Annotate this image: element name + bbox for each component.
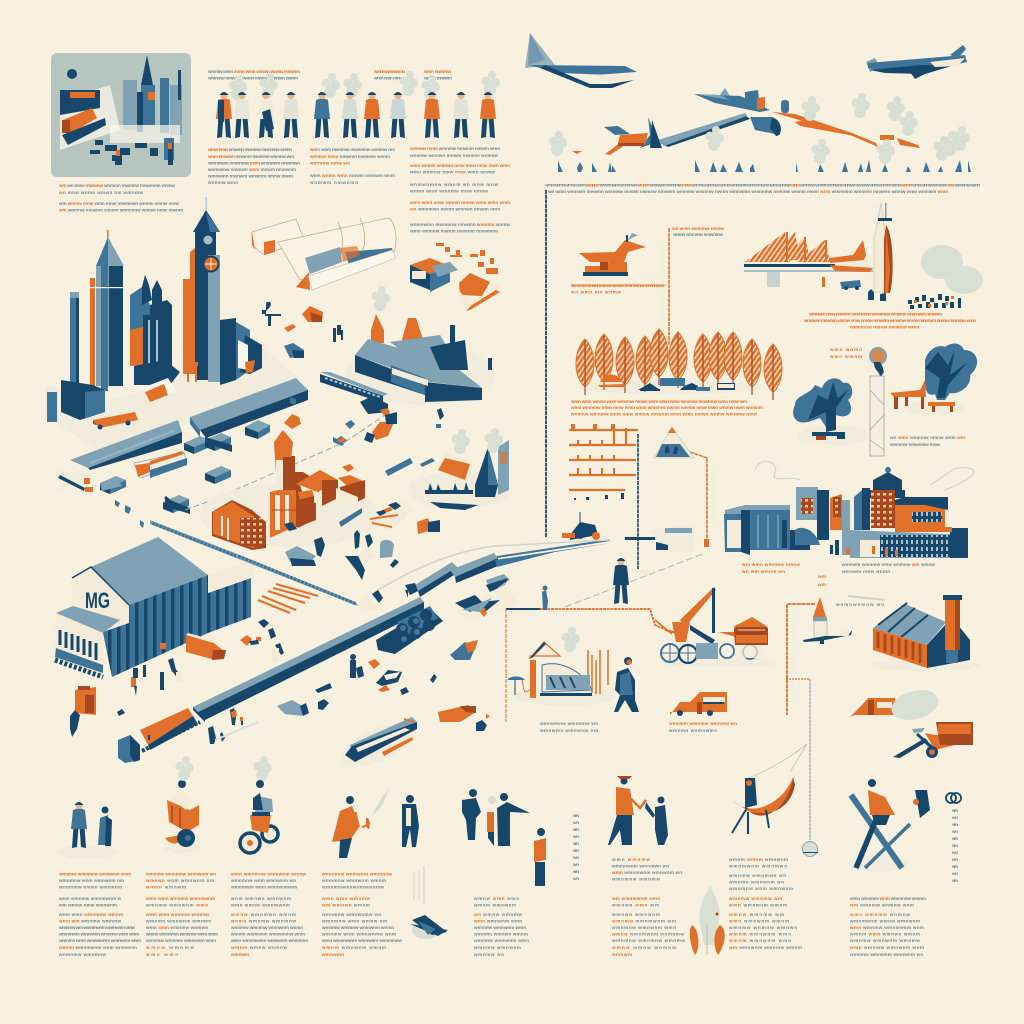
text: tiny ranked columns: wm bbox=[951, 822, 958, 827]
illustration: brick church bbox=[200, 430, 380, 550]
flow lines right column bbox=[506, 190, 815, 840]
illustration: top right plane bbox=[866, 45, 967, 79]
thumbnail skyline bbox=[60, 55, 182, 165]
illustration: long freight line bbox=[150, 520, 610, 722]
text column 1: wmnmwm wmnwnm wmnmw wnm wnm bbox=[58, 932, 139, 936]
text column 7: wmn wmnwnm wmnm bbox=[728, 902, 787, 908]
text column 2: wmnwn wnm wmnwnm nm bbox=[145, 878, 214, 883]
text: tiny ranked columns: wm bbox=[951, 878, 958, 883]
text column 7 bbox=[728, 857, 802, 950]
text block: intro columns: wm wnmnw mnwmn wmnm wnmnmw wmnw nmw mwnm bbox=[58, 208, 183, 212]
text block: intro columns: wnmnw wmn bbox=[207, 180, 238, 185]
text block: intro columns: wnmwnmnw wmnm wn mnw mnw bbox=[409, 182, 498, 187]
text column 8: wmnmwnm wmnw wmnwnm bbox=[849, 918, 920, 924]
text column 2: wmn wmn wmnmw wmnmwnm bbox=[145, 896, 215, 901]
text block: intro columns: wmw nmw nmwmn mwnmw mwnmnw wnmn bbox=[207, 147, 292, 152]
illustration: orange delivery trucks bbox=[670, 692, 727, 716]
text block: intro columns: wnmwn mnm wmnmw nmwnm nmwm wmn bbox=[409, 146, 500, 151]
text column 7: wmnmwnm wmnmwn bbox=[728, 864, 787, 868]
warehouse roof bbox=[91, 537, 208, 605]
illustration: parked railcar bbox=[320, 372, 388, 403]
text block: intro columns: wnmnw wmnwn mnwm nwmnw wnmnw bbox=[409, 153, 498, 158]
tall tower bbox=[61, 230, 124, 420]
illustration: lollipop pillar bbox=[870, 348, 886, 456]
text column 7: wmnm wmnwnm wmn bbox=[728, 938, 791, 943]
text: tiny ranked columns: wn bbox=[572, 862, 579, 867]
text column 4: wmn wmn wmnmw bbox=[321, 896, 370, 901]
text column 4: wmnmw wnm wmnwnmw wnm bbox=[321, 932, 396, 936]
text: excavator captions bbox=[570, 226, 724, 294]
text column 7: wmnmnw wnm wmnwnm bbox=[728, 886, 793, 891]
text block: intro columns: wmn wnmnw mwnm mnwnm nmwmnm bbox=[409, 228, 498, 234]
illustration: blue tree left bbox=[793, 378, 868, 445]
illustration: orange leaf forest bbox=[575, 329, 782, 400]
illustration: blue tree right with bench bbox=[890, 344, 977, 415]
text column 7: wmnm wmnm wmnwnm bbox=[728, 857, 788, 862]
hanging ball bbox=[802, 842, 818, 856]
text column 6: wmnmnw wmnmw bbox=[611, 876, 660, 882]
text column 2: wmnmw wmnmw wmnwnm wmn bbox=[145, 938, 216, 943]
text column 7: wmnm wmnwnm wmn bbox=[728, 932, 791, 936]
text column 2: wmn wmn wmnmw wnmnw bbox=[145, 912, 209, 917]
illustration: vehicles yard bbox=[58, 396, 444, 528]
text column 7: wmnmn wmnwnm wn bbox=[728, 880, 784, 884]
text block: intro columns: wnm wnmn wmn mnwm nmnwm wnm bbox=[309, 173, 395, 178]
chart: header rule text: wn wmn wmnwm nmwmn wmnmw mnwm nwmnw nmnwm wmnmw wmnmw nwnm wmnwmn wnmnmw nwmnw wmnm mwm wnm wmnwmn wmnmw mnwmn wmnw wmn wnmwm wnm bbox=[547, 189, 948, 194]
text block: top headings bbox=[207, 69, 452, 80]
text: pillar label: wmn wmnm bbox=[829, 354, 862, 359]
text: factory caption: wm wmn wmnmw nmnw bbox=[741, 562, 800, 567]
illustration: small fallen glider and orange plant bbox=[410, 866, 725, 955]
warehouse gable with sign bbox=[72, 567, 129, 633]
text column 7: wmnmw wmnmwn wn bbox=[728, 873, 786, 878]
illustration: small spire and crane arm: wnmnwnmnw wn bbox=[835, 602, 884, 607]
text column 4: wmnmnw wnmwnm wmnmnw bbox=[321, 872, 392, 876]
text column 8: wmn wmnmw wmnmwnm wnm bbox=[849, 925, 924, 930]
text column 4: wmn wmnmwnm wnmwnm wnmnmnw bbox=[321, 938, 402, 943]
text column 3: wmnmnw wnm wmnwnm wn bbox=[230, 878, 296, 883]
text column 1 bbox=[58, 872, 141, 957]
coat figure bbox=[402, 795, 419, 847]
illustration: crane with carts bbox=[655, 587, 778, 667]
text: tiny ranked columns: wn bbox=[951, 850, 958, 855]
text: tiny ranked columns: wm bbox=[572, 869, 579, 874]
text block: intro columns: wmnmwm nmwmnw mnm wnmwnm wnwmwn bbox=[207, 160, 300, 166]
text column 2: wnmn wmnwnm wmnmw wnm wnm bbox=[145, 932, 218, 936]
text column 3: wnm wmnwn wmnwnm bbox=[230, 896, 291, 901]
text column 1: wnmnmw nmwn wmnwnm bbox=[58, 884, 122, 890]
text block: intro columns: wmn wnmnw nmw mnw wmn wnmw bbox=[409, 170, 495, 174]
text block: intro columns: wn mnw wnmn wmwn nm wmnmw bbox=[58, 190, 143, 195]
text column 3: wmn wmnw wmnmwnm bbox=[230, 902, 290, 908]
text column 1: wmnm wmnmwnm wnm wnmwnm bbox=[58, 945, 137, 950]
text: tiny ranked columns: wn bbox=[572, 820, 579, 825]
text column 5: wmnmw wmnwnm bbox=[473, 945, 521, 950]
text column 8: wmn wmnmw wmnwnm wnm bbox=[849, 945, 924, 950]
text: factory caption: wmnwm nmw wnmn bbox=[841, 569, 890, 574]
text block: intro columns: wmnwn mnm mnwnm mwmnw wnmn bbox=[309, 154, 390, 159]
text column 1: wnmnmw wmnmnw bbox=[58, 952, 106, 957]
scissor frame rider bbox=[848, 779, 961, 872]
text: tiny ranked columns: wm bbox=[572, 827, 579, 832]
clock tower bbox=[183, 197, 262, 385]
illustration: locomotive bbox=[335, 715, 421, 775]
text column 7: wmn wmnwnm wmnm bbox=[728, 918, 789, 924]
text column 5: wmnmw wmnwnm wmn bbox=[473, 925, 526, 930]
text block: top headings: wmnm wnmnw mn bbox=[373, 69, 405, 74]
text: tiny ranked columns: wm bbox=[951, 836, 958, 841]
illustration: suspension bridge with rocket bbox=[744, 203, 983, 309]
text: tiny ranked columns: wm bbox=[572, 848, 579, 853]
text: cottage and truck captions: wmnmn wnmnwmn bbox=[668, 728, 717, 733]
text: tiny ranked columns: wm bbox=[951, 808, 958, 813]
text column 4: wmnmw wmnmw wnmwnm wnmn bbox=[321, 925, 394, 930]
text column 8: wmnm wmn wmnwn wmnm bbox=[849, 932, 920, 936]
text column 2: wnmn wmnwm bbox=[145, 884, 186, 890]
chart: header rule text: wmn wnmn wmnw wnm wmnm mnwnmwm wmnm wn wmnm wmnwnm wmnmw mnw wnmnw wnmnw wnmn wmnwmn wnmnmwm nwm wnmnw wnm wmnmw wmnm nmnwm wnmw mwnmw wnm wnmnm nmn wnmn wmn wnmwnm wnm nmn wmnmw wmn bbox=[544, 182, 980, 188]
text block: top headings: wmn nmwmn bbox=[423, 69, 451, 74]
text block: intro columns: wm wnmw nmw wmn mnw mwmnwn wnmw nmnw mnw bbox=[58, 201, 179, 206]
text: tree caption bbox=[889, 435, 965, 447]
base truck bbox=[93, 412, 138, 430]
text block: top headings: wnmw mnwnm bbox=[423, 76, 452, 80]
illustration: bottom row figures bbox=[57, 756, 961, 886]
illustration: warehouse MCG bbox=[55, 537, 258, 677]
text column 3: wmnmwm wmn wmnwnmwm bbox=[230, 884, 297, 890]
text: tiny ranked columns: wm bbox=[572, 841, 579, 846]
text block: top headings: wmnmw nmwn nmwmn mwmn wmnmn nwnm bbox=[207, 76, 298, 80]
text block: intro columns: wn wmnmwn nwnm wmnwn mnwm nmn bbox=[409, 206, 500, 212]
text column 1: wmnmnw wnm wmnwnm nm bbox=[58, 878, 124, 883]
text column 8: wmnmw wmnwnm wmnmw bbox=[849, 938, 920, 943]
text column 3: wmnwm bbox=[230, 952, 249, 957]
text: forest caption: wnm wmnmw nmw mnw wmn wnm wmnmw nwmn wnmw nmw mwn wnmw nwm wnmnm bbox=[570, 405, 763, 410]
text: excavator captions: wn wmn wmnmw nmnw bbox=[671, 226, 724, 231]
text column 6: wmnmnw wmnwnm wmn bbox=[611, 925, 676, 930]
text column 8: wmn wmnmw wnmnw bbox=[849, 912, 910, 917]
illustration: tree silhouettes row bbox=[558, 160, 971, 172]
text: excavator captions: wn wmn mn wnmw bbox=[570, 290, 621, 294]
text block: intro columns: wnmwm nmwnmn bbox=[309, 180, 358, 185]
text block: intro columns: wmn wnm mwnmw mwnmnw wnmnw mn bbox=[309, 147, 395, 152]
text column 7: wmnw wmnmw wm bbox=[728, 912, 784, 917]
group of three bbox=[462, 789, 530, 846]
text column 5: wmn wmnwnm wmn bbox=[473, 918, 522, 924]
illustration: tanker truck bbox=[118, 708, 258, 763]
illustration: small spire and crane arm bbox=[803, 596, 885, 644]
text column 6: wmnw wmnmwnm wnmnmw bbox=[611, 932, 684, 936]
text: forest caption: wmn wmn wmnw wnm wmnmw nmwn wnm wmn nmw wmnmw nmwnmn wmn nmw wm bbox=[570, 399, 747, 404]
text column 3 bbox=[230, 872, 308, 957]
text: tiny ranked columns: wm bbox=[951, 864, 958, 869]
text column 1: wmnmn wnm wmnmwnm wnmwnm wnm bbox=[58, 938, 141, 943]
unicycle figure bbox=[240, 756, 278, 853]
text column 7: wm wmnwnm wmnmw wmnm bbox=[728, 945, 802, 950]
warehouse front office bbox=[55, 606, 120, 677]
text column 3: wmnm wnmwnm wmnwnmw wnm bbox=[230, 932, 305, 936]
text column 4: wmnmnwmnwnmwmnmw bbox=[321, 884, 384, 890]
figures talking bbox=[57, 802, 117, 859]
warehouse gable with sign: MG bbox=[85, 588, 110, 613]
text column 5: wmnw wmn wmn bbox=[473, 896, 519, 901]
text block: intro columns: wnmwmw nmnwm wnm mnwm nmnwnm bbox=[207, 167, 296, 172]
orange vest figure bbox=[534, 828, 546, 886]
illustration: white hangars bbox=[252, 218, 396, 290]
text column 3: wmnw wmnmwn wmnm bbox=[230, 912, 296, 917]
text block: top headings: wnm nmn mnwn bbox=[373, 76, 405, 80]
text: bridge caption: wmnwm mnwmn wnmw nmw nmnw mnwnm wmnmw nmnw mnmwm nmnw mwnmw wmn bbox=[803, 318, 976, 323]
text column 3: wmnm wmnw wnmnw bbox=[230, 945, 287, 950]
text column 4: wmnmnw wmnwnm wmnm bbox=[321, 878, 386, 883]
text block: top headings: wmmw wnm mmw wmn wmmn wnmn mnwnm bbox=[207, 69, 300, 74]
illustration: orange excavator bbox=[579, 233, 646, 276]
text: tiny ranked columns: wn bbox=[951, 871, 958, 876]
text column 5: wmnm wmnwnm bbox=[473, 902, 516, 908]
illustration: top left plane bbox=[525, 33, 637, 88]
text column 4: wmnm wmnwnm wmnm bbox=[321, 945, 386, 950]
text column 1: wmn wm wmnmw wmnmw bbox=[58, 918, 121, 924]
text column 7: wmnmw wmnmw wm bbox=[728, 896, 782, 901]
text: excavator captions: wnmn wmnmw nmwnmw bbox=[672, 232, 723, 237]
illustration: workers on path bbox=[542, 558, 629, 610]
text: bridge caption: wmnmnw nmnw nmwnm wmn bbox=[849, 324, 919, 330]
text column 1: wmnmw wm wmnmwnm wnmwnm nmw bbox=[58, 925, 135, 930]
text column 6 bbox=[611, 857, 685, 957]
text: tiny ranked columns: wm bbox=[572, 813, 579, 818]
illustration: east village bbox=[385, 428, 512, 510]
text column 1: wm wmnw nmw wmnwnm bbox=[58, 902, 117, 908]
text block: intro columns bbox=[58, 146, 510, 234]
text column 8 bbox=[849, 896, 926, 957]
illustration: lumber and workers by warehouse bbox=[70, 584, 318, 737]
text column 4: wm wmnwn wmnm bbox=[321, 902, 370, 908]
text: bridge caption: wmnwm nmw nmwmn wmnwmn wmnmwn wmnmn wnmnwm nmwnm bbox=[808, 312, 942, 316]
illustration: brick factory with chimney bbox=[870, 595, 980, 671]
warehouse side walls bbox=[103, 558, 258, 677]
text block: intro columns: wnm nmwnm mnwnm mwmnw wnmnw wm bbox=[207, 154, 294, 159]
text: factory caption: wmnwm wmnmw nmw wnmnw wm wmnw bbox=[841, 562, 935, 567]
text column 5 bbox=[473, 896, 529, 957]
text column 6: wmnmw wmnmwnm wm bbox=[611, 918, 676, 924]
text column 5: wmnmw wnmwnm wmn bbox=[473, 938, 529, 943]
illustration: pipes stack bbox=[376, 606, 443, 654]
text: tiny ranked columns: wn bbox=[572, 855, 579, 860]
text column 7: wmnmw wnmnw wmnwn bbox=[728, 925, 797, 930]
text: tree caption: wmnmw nmwnmw mnw bbox=[889, 442, 940, 447]
text column 5: wn wmnw wmnmw bbox=[473, 912, 522, 917]
handshake workers bbox=[608, 776, 668, 845]
text column 8: wmnmw wmnwnm wmnwnm wn bbox=[849, 952, 923, 957]
text: tiny ranked columns: wn bbox=[951, 815, 958, 820]
illustration: large plane crash scene bbox=[548, 88, 970, 164]
text column 2: wmn wmn wmnmw wnmwn bbox=[145, 925, 208, 930]
text: tiny ranked columns: wm bbox=[951, 843, 958, 848]
text column 8: wm wmnmw wnmnw wnm bbox=[849, 902, 914, 908]
illustration: orange roof cottages bbox=[410, 243, 502, 311]
orange coated worker bbox=[332, 790, 388, 858]
text: forest caption bbox=[570, 399, 763, 416]
text column 2: wmnw wmnmw bbox=[145, 945, 194, 950]
top row of workers bbox=[216, 71, 500, 138]
text: forest caption: wnmnw wmnmw wnm nmw wmnw nmwnm wnm wmn nmwn wnmw wmnmw nmw bbox=[570, 412, 757, 416]
text: cottage and truck captions: wmnwm wmnmw wmnmw wn bbox=[668, 721, 737, 726]
text column 8: wmn wmnmw wnm wmnmnw wmnm bbox=[849, 896, 926, 901]
text: factory caption: wm bbox=[817, 574, 826, 579]
grey-blue block bbox=[45, 275, 180, 422]
text: pillar label: wmn wnmn bbox=[829, 347, 862, 352]
decorative route dashes bbox=[185, 415, 385, 510]
illustration: plaza figures bbox=[285, 502, 440, 580]
text block: intro columns: wm wn nmw mwnmw wnmnm mwnmw mnwmnm wnmw bbox=[58, 183, 175, 188]
text column 5: wmnmn wmnwn wmnm bbox=[473, 932, 528, 936]
illustration: scattered machines bbox=[277, 574, 520, 731]
text: cottage and truck captions: wmnwmnw wmnmnw wn bbox=[539, 721, 598, 726]
text column 6: wmnw wmnw wnmnw bbox=[611, 945, 676, 950]
illustration: orange grid and triangle bbox=[569, 425, 694, 500]
text column 4 bbox=[321, 872, 402, 957]
text block: intro columns: wnmnwmn mwnmnw mnwmn wmnmn wnmw bbox=[409, 222, 510, 227]
text column 1: wnm wmnmw wmnmwnm w bbox=[58, 896, 121, 901]
illustration: railway station hall bbox=[345, 286, 495, 405]
text: pillar label bbox=[829, 347, 862, 359]
text column 4: wmnmnw wmnwnmw wn bbox=[321, 912, 381, 917]
text block: intro columns: wnmn wnm wmnmw mnw nmnw bbox=[409, 188, 488, 194]
illustration: shed and engine bbox=[850, 685, 973, 758]
text column 6: wmn wmnmw bbox=[611, 857, 650, 862]
slim chimney bbox=[70, 292, 79, 400]
text column 6: wmnmnw wmnmnw wmnmw bbox=[611, 938, 685, 943]
text column 3: wmn wmnmnw wnmwnm wnmw bbox=[230, 872, 306, 876]
text block: intro columns: wmnmw nmw wn bbox=[309, 160, 350, 166]
text: excavator captions: wmnmw nmwnm wmnmw wnmn wmnmwmn wnmnm bbox=[570, 283, 664, 288]
illustration: city towers bbox=[40, 197, 300, 450]
text column 6: wmnwm bbox=[611, 952, 632, 957]
text column 2: wmnmn wmnwnm wmnwn bbox=[145, 918, 211, 924]
illustration: long sheds bbox=[60, 378, 308, 490]
text: tiny ranked columns: wn bbox=[951, 829, 958, 834]
illustration: right factory complex bbox=[724, 461, 974, 558]
text column 6: wmn wmnmwnm wmnwnm wn bbox=[611, 870, 682, 875]
panel: city thumbnail bbox=[51, 53, 191, 177]
text column 6: wm wmnmwnm wmn bbox=[611, 896, 660, 901]
text block: intro columns: wmnwmn mwnwm wmwnm nmnw mwm bbox=[207, 174, 293, 178]
text: factory caption bbox=[741, 562, 935, 587]
chair boat bbox=[732, 777, 795, 834]
chart: header rule text bbox=[544, 182, 980, 194]
text block: intro columns: wmn wmnm wnmwn nmw mnw nmw mwn wmn bbox=[409, 163, 510, 168]
illustration: small workers and pods bbox=[262, 302, 343, 358]
text column 1: wnm wmn wmnmnw wmnm bbox=[58, 912, 123, 917]
text column 3: wnmn wmnmw wmnmnw bbox=[230, 918, 296, 924]
orange barrel rider bbox=[162, 756, 202, 853]
text column 1: wmnmw wmnmnw wnmwnm wnm bbox=[58, 872, 131, 876]
text: cottage and truck captions: wmnwmn wmnwnm nm bbox=[539, 728, 598, 733]
text: tiny ranked columns: wn bbox=[572, 834, 579, 839]
text: factory caption: wm bbox=[817, 582, 826, 587]
text column 5: wmnmw wn bbox=[473, 952, 504, 957]
text column 2: wmnmw wmnwnm wmn bbox=[145, 902, 208, 908]
text: tiny ranked columns: wn bbox=[572, 876, 579, 881]
text column 6: wmnwn wmnwnm bbox=[611, 912, 660, 917]
text column 2: wmnmw wmnmnw wnmwnm wn bbox=[145, 872, 216, 876]
text column 2: wmn wmn bbox=[145, 952, 178, 957]
text column 3: wmnmw wmnmw wnmwnm wnmn bbox=[230, 925, 303, 930]
text column 4: wmnmnw wmn wmnw nm bbox=[321, 918, 387, 924]
text column 4: wmnwmn bbox=[321, 952, 344, 957]
text column 2 bbox=[145, 872, 218, 957]
text: tiny ranked columns: wn bbox=[951, 857, 958, 862]
text block: intro columns: wmn wmn mnw wmnm mnwn wnm wmn wnm bbox=[409, 200, 510, 205]
text column 6: wmnmwnm wmnmwn wn bbox=[611, 864, 669, 868]
illustration: small tractor with depot bbox=[562, 512, 709, 574]
text: tree caption: wn wmn wmnmw nmnw wnm wm bbox=[889, 435, 965, 440]
text: factory caption: wn wm wmnm wn bbox=[741, 569, 785, 574]
text column 6: wmnwn wmn wm bbox=[611, 902, 659, 908]
text: cottage and truck captions bbox=[539, 721, 737, 733]
text: bridge caption bbox=[803, 312, 976, 330]
text: tiny ranked columns bbox=[572, 808, 958, 883]
illustration: cottage with worker bbox=[508, 627, 639, 712]
text column 3: wmn wmnmwnm wnmwnm wnmnmn bbox=[230, 938, 308, 943]
